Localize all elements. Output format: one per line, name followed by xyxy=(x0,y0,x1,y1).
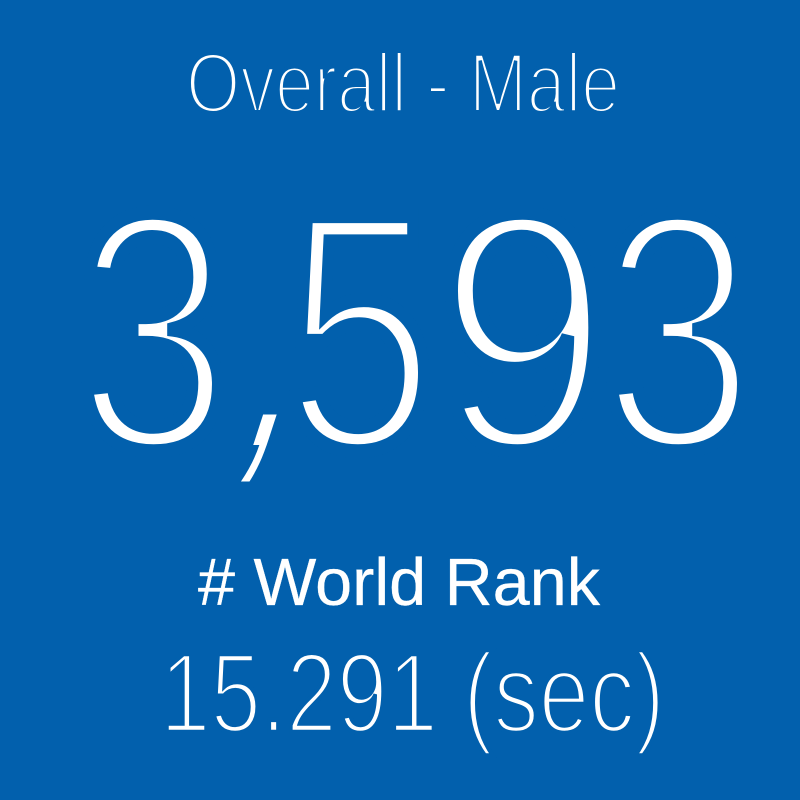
big number: 3,593: 3 xyxy=(77,144,230,520)
big number: 3,593: , xyxy=(220,187,363,506)
big number: 3,593: 9 xyxy=(437,143,609,520)
big number: 3,593: 5 xyxy=(285,143,435,520)
label: world rank: # World Rank xyxy=(198,545,600,620)
title: Overall - Male xyxy=(186,36,620,130)
big number: 3,593: 3 xyxy=(602,144,755,520)
big number: 3,593 xyxy=(77,143,755,520)
time value: 15.291 (sec) xyxy=(160,630,665,756)
